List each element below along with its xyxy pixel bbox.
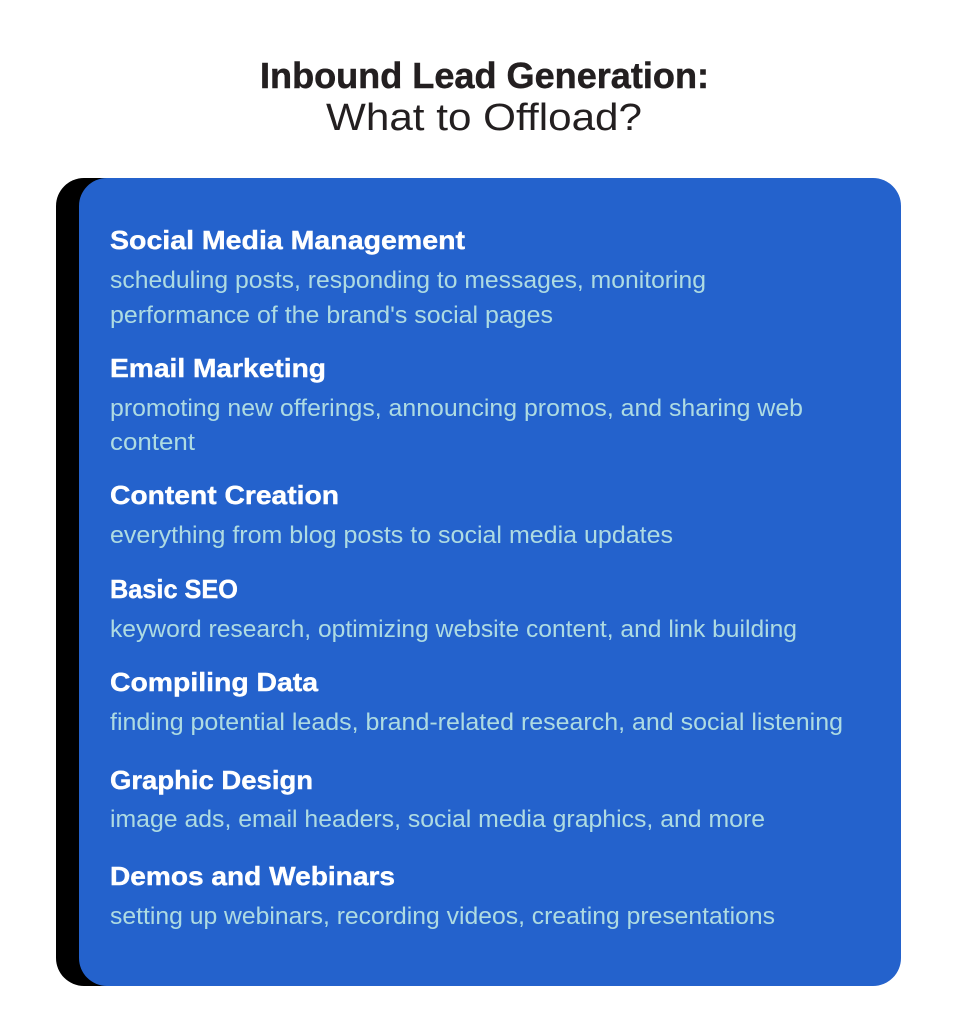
item: Demos and Webinars: Demos and Webinars — [110, 861, 395, 891]
panel: blue card — [79, 178, 901, 986]
item: Graphic Design: Graphic Design — [110, 765, 313, 795]
item: Demos and Webinars: setting up webinars, recording videos, creating presentations — [110, 903, 775, 930]
title: What to Offload? — [326, 97, 642, 139]
item: Graphic Design: image ads, email headers, social media graphics, and more — [110, 806, 765, 833]
item: Content Creation: Content Creation — [110, 480, 339, 510]
item: Email Marketing — [110, 353, 803, 456]
item: Basic SEO — [110, 574, 797, 643]
item: Email Marketing: content — [110, 429, 195, 456]
item: Social Media Management: scheduling posts, responding to messages, monitoring — [110, 267, 706, 294]
item: Demos and Webinars — [110, 861, 775, 930]
item: Compiling Data — [110, 667, 843, 736]
title — [260, 55, 709, 139]
item: Social Media Management: Social Media Management — [110, 225, 465, 255]
item: Basic SEO: keyword research, optimizing website content, and link building — [110, 616, 797, 643]
item: Social Media Management — [110, 225, 706, 329]
item: Graphic Design — [110, 765, 765, 833]
item: Social Media Management: performance of the brand's social pages — [110, 302, 553, 329]
panel: black backing — [56, 178, 256, 986]
item: Content Creation — [110, 480, 673, 549]
item: Compiling Data: finding potential leads, brand-related research, and social listening — [110, 709, 843, 736]
title: Inbound Lead Generation: — [260, 55, 709, 96]
item: Compiling Data: Compiling Data — [110, 667, 319, 697]
item: Email Marketing: promoting new offerings, announcing promos, and sharing web — [110, 395, 803, 422]
item: Content Creation: everything from blog posts to social media updates — [110, 522, 673, 549]
item: Email Marketing: Email Marketing — [110, 353, 326, 383]
item: Basic SEO: Basic SEO — [110, 574, 238, 604]
